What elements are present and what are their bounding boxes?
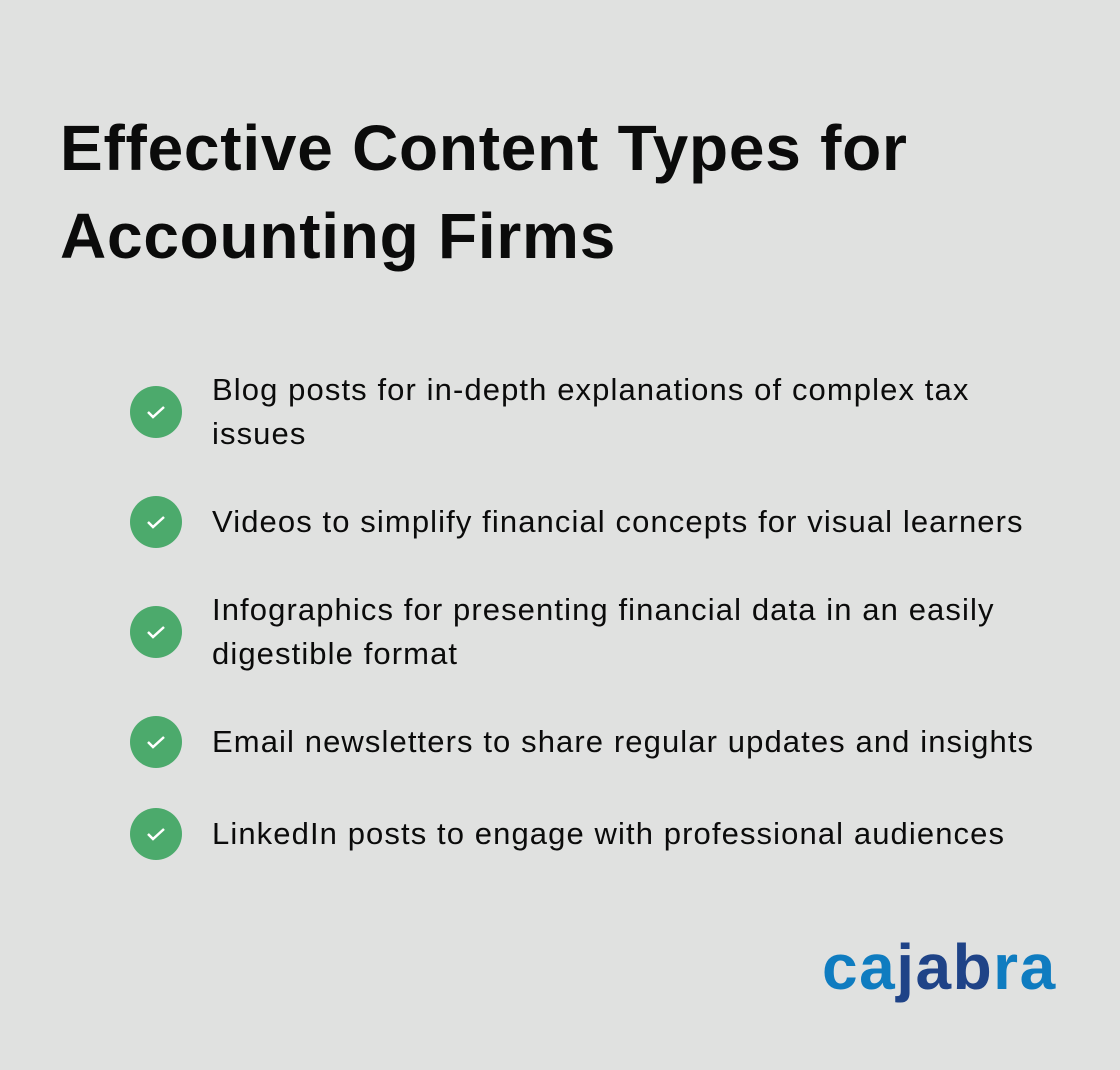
icon: check — [130, 386, 182, 438]
icon: check — [130, 496, 182, 548]
item: videos — [130, 496, 1024, 548]
text: linkedin: LinkedIn posts to engage with professional audiences — [212, 816, 1005, 851]
icon: check — [130, 606, 182, 658]
item: infographics — [130, 592, 995, 671]
logo: cajabra: cajabra — [822, 931, 1057, 1003]
text: blog posts: issues — [212, 416, 306, 451]
text: blog posts — [212, 372, 969, 451]
text: email newsletters: Email newsletters to share regular updates and insights — [212, 724, 1034, 759]
item: linkedin — [130, 808, 1005, 860]
text: infographics: Infographics for presenting financial data in an easily — [212, 592, 995, 627]
icon: check — [130, 716, 182, 768]
item: blog posts — [130, 372, 969, 451]
text: infographics: digestible format — [212, 636, 458, 671]
title: Accounting Firms — [60, 200, 616, 272]
text: videos: Videos to simplify financial concepts for visual learners — [212, 504, 1024, 539]
icon: check — [130, 808, 182, 860]
title: Effective Content Types for — [60, 112, 908, 184]
text: infographics — [212, 592, 995, 671]
text: blog posts: Blog posts for in-depth explanations of complex tax — [212, 372, 969, 407]
title — [60, 112, 908, 272]
item: email newsletters — [130, 716, 1034, 768]
